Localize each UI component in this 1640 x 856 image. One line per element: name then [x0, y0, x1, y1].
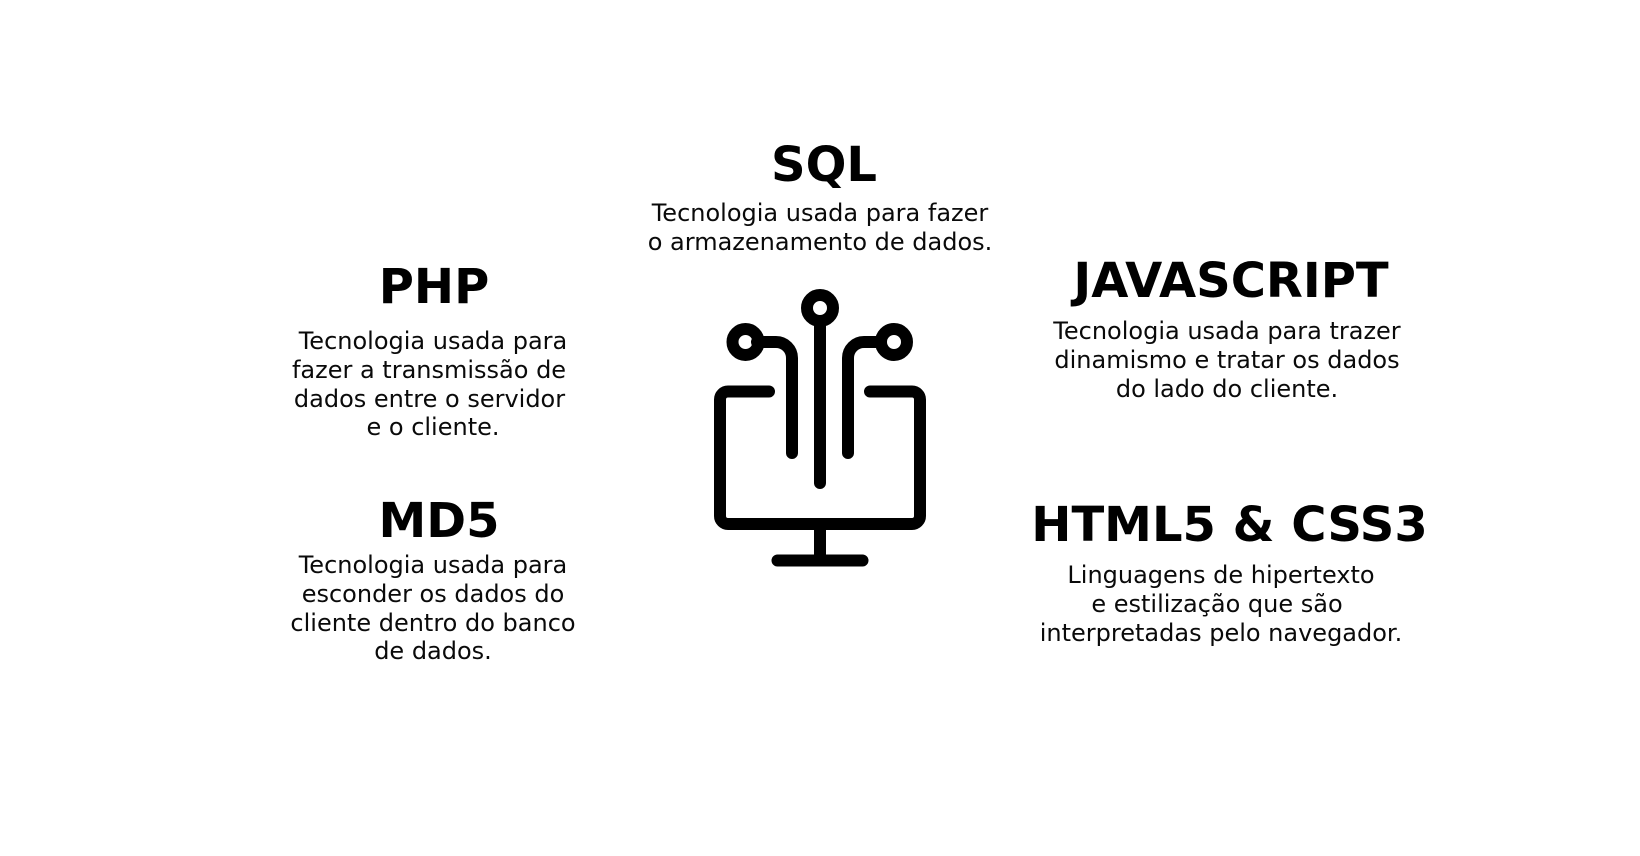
icon part: center circuit line [814, 321, 826, 483]
icon part: left node [732, 329, 758, 355]
text block: HTML5 and CSS3 description: e estilização que são [1091, 590, 1343, 618]
icon part: right circuit line [848, 342, 881, 453]
text block: MD5 description: esconder os dados do [302, 580, 564, 608]
text block: MD5 description: cliente dentro do banco [290, 609, 576, 637]
text block: JavaScript description: dinamismo e tratar os dados [1054, 346, 1400, 374]
panel: HTML5 and CSS3 [1031, 497, 1428, 647]
text block: PHP description [292, 327, 567, 441]
text block: HTML5 and CSS3 description: Linguagens de hipertexto [1067, 561, 1375, 589]
text block: HTML5 and CSS3 description: interpretadas pelo navegador. [1040, 619, 1402, 647]
heading: HTML5 & CSS3: HTML5 & CSS3 [1031, 497, 1428, 553]
text block: MD5 description: Tecnologia usada para [298, 551, 567, 579]
heading: JAVASCRIPT: JAVASCRIPT [1070, 253, 1389, 309]
text block: PHP description: dados entre o servidor [294, 385, 565, 413]
text block: MD5 description [290, 551, 576, 665]
text block: SQL description: o armazenamento de dados. [648, 228, 992, 256]
icon part: monitor stand [778, 524, 862, 560]
icon part: left circuit line [757, 342, 792, 453]
heading: MD5: MD5 [378, 493, 500, 549]
icon part: top node [807, 295, 833, 321]
text block: MD5 description: de dados. [374, 637, 492, 665]
text block: HTML5 and CSS3 description [1040, 561, 1402, 647]
text block: PHP description: Tecnologia usada para [298, 327, 567, 355]
panel: PHP [292, 259, 567, 441]
text block: SQL description: Tecnologia usada para fazer [651, 199, 988, 227]
text block: SQL description [648, 199, 992, 256]
text block: PHP description: fazer a transmissão de [292, 356, 566, 384]
text block: PHP description: e o cliente. [366, 413, 500, 441]
icon: monitor with circuit lines [720, 295, 920, 560]
text block: JavaScript description: Tecnologia usada para trazer [1052, 317, 1401, 345]
panel: JavaScript [1052, 253, 1401, 403]
icon part: right node [881, 329, 907, 355]
icon part: monitor frame [720, 392, 920, 524]
panel: SQL [648, 137, 992, 256]
heading: PHP: PHP [379, 259, 489, 315]
panel: MD5 [290, 493, 576, 665]
text block: JavaScript description [1052, 317, 1401, 403]
text block: JavaScript description: do lado do cliente. [1116, 375, 1338, 403]
heading: SQL: SQL [771, 137, 877, 193]
